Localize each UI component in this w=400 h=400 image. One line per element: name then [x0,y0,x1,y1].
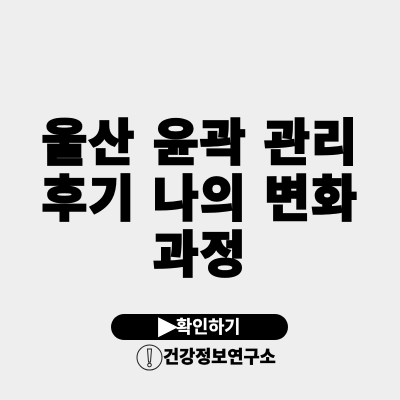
title: 후기 나의 변화 [42,172,358,227]
brand name: 건강정보연구소 [163,347,276,367]
button: confirm: 확인하기 [176,317,240,337]
icon: exclamation circle [136,344,162,370]
title [42,116,358,283]
button: confirm [111,314,288,340]
button: confirm: ▶ [158,311,178,341]
title: 울산 윤곽 관리 [42,116,358,171]
title: 과정 [153,228,247,283]
brand: health info lab [136,344,276,370]
